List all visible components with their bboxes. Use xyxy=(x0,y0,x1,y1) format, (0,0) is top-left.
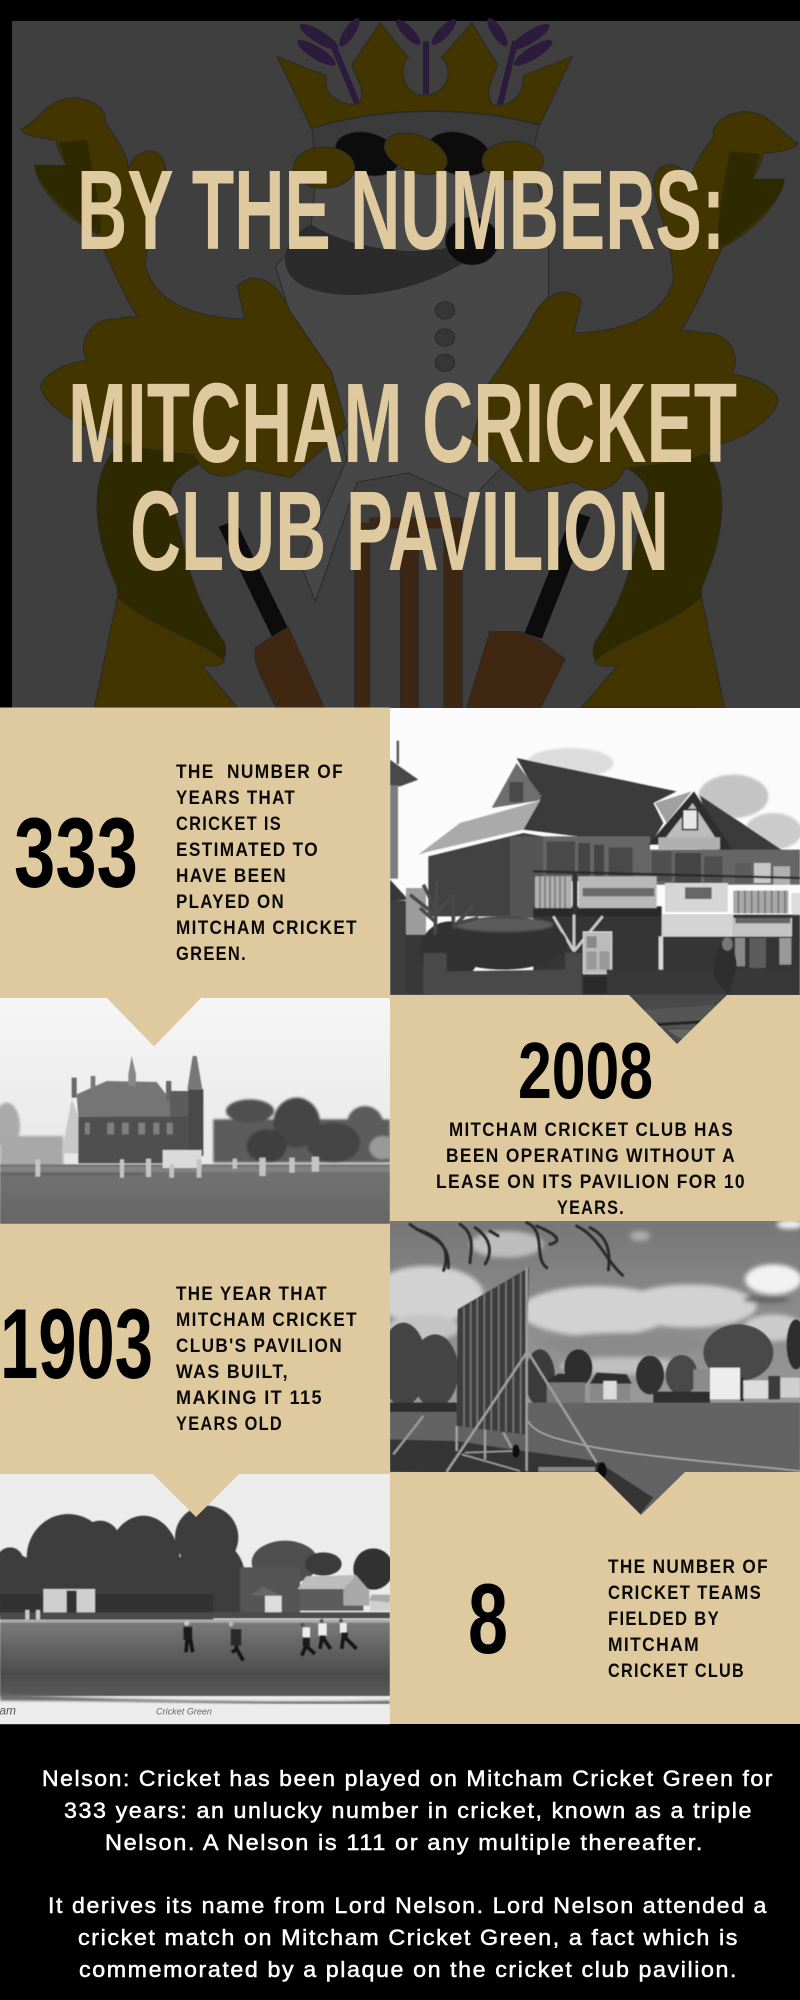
panel shape with arrow xyxy=(0,1224,390,1517)
description text: GREEN. xyxy=(176,944,247,965)
description text: MITCHAM CRICKET CLUB HAS xyxy=(449,1120,734,1141)
footer text block: Nelson. A Nelson is 111 or any multiple thereafter. xyxy=(105,1830,704,1855)
number: 333: 333 xyxy=(14,797,138,908)
description text xyxy=(176,762,358,965)
panel shape with notch xyxy=(390,1472,800,1724)
photo: sight screen on the green xyxy=(370,1220,800,1518)
panel shape with arrow xyxy=(0,708,390,1046)
sight screen xyxy=(457,1268,529,1434)
wreath xyxy=(328,124,406,183)
footer text block: It derives its name from Lord Nelson. Lord Nelson attended a xyxy=(48,1893,768,1918)
description text: THE YEAR THAT xyxy=(176,1284,328,1305)
description text: CRICKET TEAMS xyxy=(608,1583,762,1604)
houses xyxy=(547,1381,585,1403)
photo: vintage postcard of Cricket Green xyxy=(0,1474,393,1724)
footer text block: 333 years: an unlucky number in cricket, known as a triple xyxy=(64,1798,753,1823)
header background xyxy=(12,21,800,709)
panel: header with crest xyxy=(12,16,800,709)
number: 1903: 1903 xyxy=(0,1288,153,1399)
description text: YEARS THAT xyxy=(176,788,296,809)
description text: MITCHAM CRICKET xyxy=(176,918,358,939)
description text: CRICKET IS xyxy=(176,814,282,835)
description text: MITCHAM CRICKET xyxy=(176,1310,358,1331)
description text: WAS BUILT, xyxy=(176,1362,289,1383)
icon: club crest xyxy=(20,16,798,707)
branches xyxy=(410,1223,623,1276)
description text: YEARS. xyxy=(557,1198,625,1219)
photo: pavilion building xyxy=(390,708,800,1045)
panel: 1903 built stat xyxy=(0,1224,390,1517)
description text xyxy=(608,1557,769,1682)
title xyxy=(68,147,737,594)
photo: Victorian school across the green xyxy=(0,996,396,1224)
panel: 2008 lease stat xyxy=(390,995,800,1221)
description text: MAKING IT 115 xyxy=(176,1388,323,1409)
lower mantling xyxy=(97,427,722,707)
footer text block xyxy=(42,1766,774,1982)
panel: 8 teams stat xyxy=(390,1472,800,1724)
number: 8: 8 xyxy=(468,1563,508,1674)
description text: THE NUMBER OF xyxy=(608,1557,769,1578)
photo: vintage postcard of Cricket Green: Cricket Green xyxy=(156,1707,212,1717)
description text: BEEN OPERATING WITHOUT A xyxy=(446,1146,736,1167)
footer text block: Nelson: Cricket has been played on Mitcham Cricket Green for xyxy=(42,1766,774,1791)
description text: ESTIMATED TO xyxy=(176,840,319,861)
rampant supporters xyxy=(20,98,347,478)
description text: MITCHAM xyxy=(608,1635,700,1656)
ground xyxy=(390,1403,800,1518)
description text: HAVE BEEN xyxy=(176,866,287,887)
trees xyxy=(380,1323,458,1408)
description text: PLAYED ON xyxy=(176,892,285,913)
description text xyxy=(176,1284,358,1435)
description text: FIELDED BY xyxy=(608,1609,720,1630)
number: 2008: 2008 xyxy=(518,1026,653,1115)
description text xyxy=(436,1120,746,1219)
wicket xyxy=(355,518,462,707)
footer text block: commemorated by a plaque on the cricket club pavilion. xyxy=(79,1957,738,1982)
cricket bats xyxy=(227,523,281,634)
description text: THE NUMBER OF xyxy=(176,762,344,783)
panel shape with notch xyxy=(390,995,800,1221)
description text: CRICKET CLUB xyxy=(608,1661,745,1682)
players xyxy=(186,1631,357,1661)
description text: LEASE ON ITS PAVILION FOR 10 xyxy=(436,1172,746,1193)
description text: YEARS OLD xyxy=(176,1414,283,1435)
footer text block: cricket match on Mitcham Cricket Green, a fact which is xyxy=(78,1925,739,1950)
panel: 333 years stat xyxy=(0,708,390,1046)
description text: CLUB'S PAVILION xyxy=(176,1336,343,1357)
